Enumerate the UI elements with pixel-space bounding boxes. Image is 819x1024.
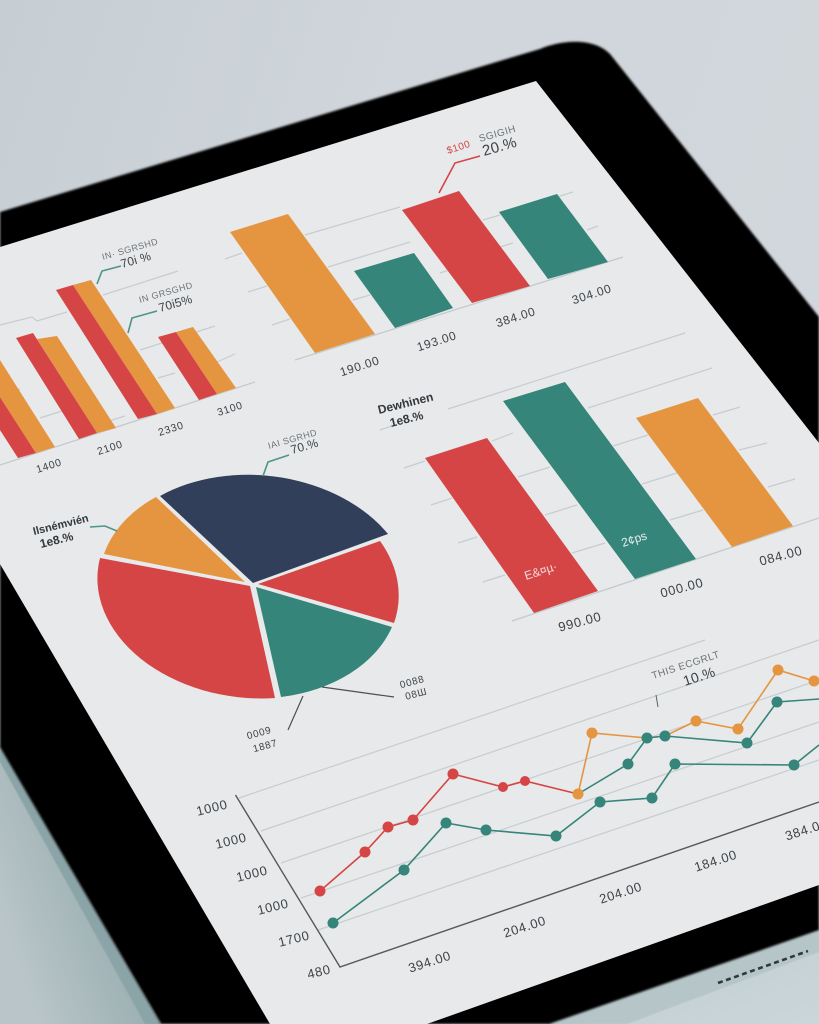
- series: red: [314, 768, 578, 896]
- panel: grouped bar chart top left: [0, 236, 255, 476]
- slice: teal: [256, 587, 392, 697]
- x axis labels: [406, 818, 819, 976]
- x axis labels: 204.00: [597, 879, 644, 907]
- slice: red right: [258, 541, 399, 623]
- axis labels: 190.00: [338, 353, 381, 379]
- x axis labels: 184.00: [692, 847, 739, 875]
- teal bar: 2¢ps: [620, 528, 649, 550]
- axis labels: 2100: [96, 438, 124, 458]
- panel: bar chart middle right: [376, 333, 819, 635]
- y axis labels: 480: [306, 961, 332, 982]
- callout: first bar note: [97, 236, 159, 284]
- desk shadow bottom left: [0, 750, 160, 1024]
- teal bar: [503, 382, 696, 579]
- panel: pie chart: [32, 427, 429, 755]
- axis labels: [35, 399, 244, 476]
- x axis labels: 204.00: [501, 913, 548, 941]
- panel: bar chart top: [225, 124, 623, 379]
- slice: red large: [97, 558, 275, 698]
- y axis labels: 1000: [256, 896, 290, 918]
- callout: top slice: IAI SGRHD: [267, 427, 318, 451]
- series: orange: [578, 664, 819, 794]
- red bar: E&¤µ·: [523, 559, 559, 583]
- desk shadow bottom right: [549, 925, 819, 1024]
- callout: line chart note: [651, 649, 721, 707]
- callout: line chart note: 10.%: [681, 664, 717, 689]
- callout: top slice: [263, 427, 320, 476]
- series: teal lower: [328, 745, 819, 928]
- y axis labels: 1000: [214, 830, 248, 852]
- callout: lower right slice: 08Ш: [404, 686, 429, 703]
- callout: bottom slice: 1887: [252, 738, 279, 755]
- callout: bottom slice: 0009: [246, 725, 273, 742]
- callout: red bar note: $100: [446, 139, 472, 157]
- axis labels: [557, 543, 804, 635]
- x axis labels: 394.00: [406, 948, 453, 976]
- callout: second bar note: 70i5%: [157, 292, 194, 315]
- series: teal upper: [572, 696, 819, 800]
- axis labels: [338, 281, 613, 379]
- callout: left slice: Ilsnémvién: [32, 512, 90, 538]
- tablet silver edge bottom: [545, 925, 819, 1024]
- axes: [236, 795, 819, 967]
- callout: lower right slice: [322, 674, 429, 703]
- axis labels: 990.00: [557, 609, 603, 635]
- bars: [0, 280, 236, 458]
- y axis labels: 1700: [277, 928, 311, 950]
- tablet silver edge left: [0, 745, 161, 1024]
- tablet speaker dots: [718, 951, 808, 983]
- axis labels: 304.00: [570, 281, 613, 307]
- chart title: [376, 390, 435, 430]
- callout: left slice: [32, 512, 117, 551]
- panel: line chart: [195, 640, 819, 982]
- callout: first bar note: 70i %: [119, 249, 153, 271]
- chart title: 1e8.%: [388, 408, 425, 430]
- y axis labels: 1000: [235, 863, 269, 885]
- callout: bottom slice: [246, 696, 303, 755]
- slice: orange: [104, 497, 245, 582]
- y axis labels: [195, 797, 332, 982]
- axis labels: 000.00: [659, 575, 705, 601]
- callout: red bar note: SGIGIH: [478, 124, 517, 145]
- axis labels: 1400: [35, 456, 63, 476]
- callout: top slice: 70.%: [289, 436, 320, 457]
- y axis labels: 1000: [195, 797, 229, 819]
- chart title: Dewhinen: [376, 390, 435, 417]
- axis labels: 3100: [216, 399, 244, 419]
- bars: [230, 191, 608, 353]
- callout: second bar note: IN GRSGHD: [138, 280, 194, 305]
- callout: red bar note: [439, 124, 519, 193]
- callout: line chart note: THIS ECGRLT: [651, 649, 721, 682]
- axis labels: 2330: [157, 419, 185, 439]
- orange bar: [636, 398, 793, 547]
- slice: navy: [160, 475, 388, 583]
- callout: lower right slice: 0088: [399, 674, 426, 691]
- callout: red bar note: 20.%: [480, 134, 519, 160]
- axis labels: 384.00: [494, 304, 537, 330]
- red bar: [425, 438, 598, 613]
- axis labels: 084.00: [758, 543, 804, 569]
- callout: first bar note: IN· SGRSHD: [101, 236, 159, 262]
- callout: second bar note: [128, 280, 194, 333]
- axis labels: 193.00: [415, 328, 458, 354]
- callout: left slice: 1e8.%: [38, 529, 75, 551]
